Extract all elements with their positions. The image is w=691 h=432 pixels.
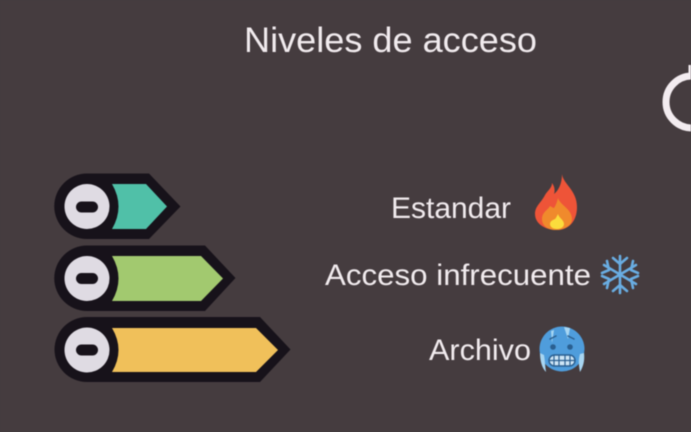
title: Niveles de acceso [244, 21, 537, 60]
icon: fire [535, 174, 577, 230]
label: archivo: Archivo [429, 334, 531, 367]
level bar: acceso infrecuente [54, 246, 236, 311]
icon: freezing face [540, 326, 584, 372]
label: acceso infrecuente: Acceso infrecuente [325, 259, 591, 292]
level bar: estandar [54, 174, 181, 239]
cropped ring icon at right edge [666, 65, 691, 128]
level bar: archivo [54, 317, 290, 382]
icon: snowflake [602, 256, 638, 293]
label: estandar: Estandar [391, 192, 511, 225]
